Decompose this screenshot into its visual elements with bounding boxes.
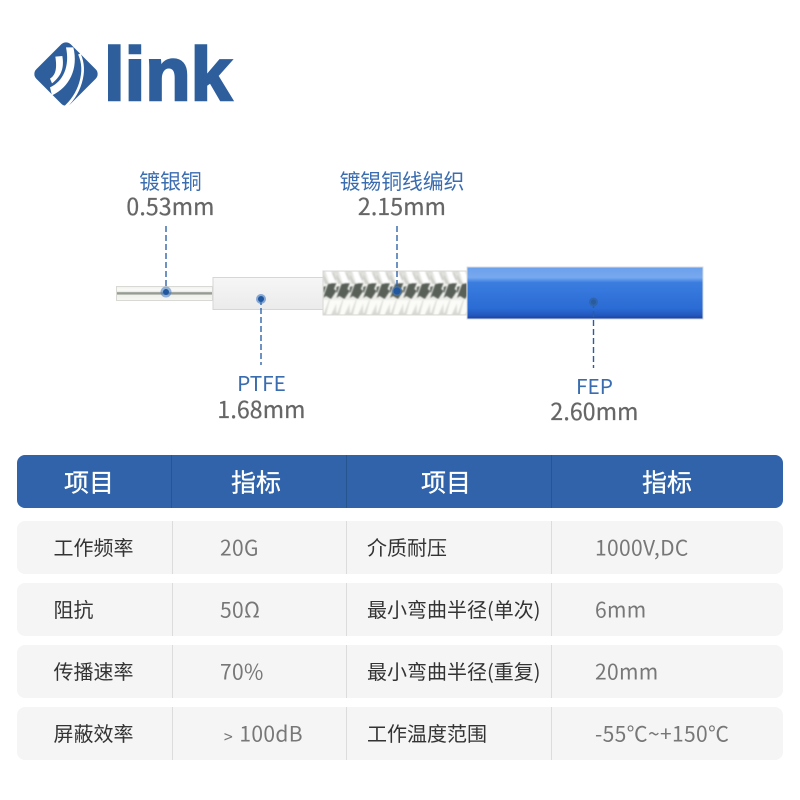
- label: silver-plated copper: [126, 165, 215, 222]
- header: item: 项目: [421, 464, 471, 500]
- material name: PTFE: [237, 367, 286, 397]
- item: 传播速率: [54, 656, 134, 685]
- item: 工作频率: [54, 532, 134, 561]
- label: tinned copper braid: [340, 165, 464, 222]
- logo: [34, 40, 234, 112]
- braided shield: [323, 271, 467, 315]
- item: 工作温度范围: [367, 718, 487, 747]
- table header: [17, 455, 783, 508]
- value: ﹥100dB: [218, 718, 303, 748]
- leader: PTFE: [256, 294, 266, 365]
- leader: FEP: [589, 298, 598, 368]
- header: value: 指标: [231, 464, 281, 500]
- value: 50Ω: [220, 594, 260, 624]
- table row 3: [17, 645, 783, 698]
- value: 1000V,DC: [595, 532, 689, 562]
- label: FEP: [550, 370, 639, 427]
- item: 屏蔽效率: [54, 718, 134, 747]
- FEP jacket: [467, 267, 703, 319]
- table row 1: [17, 521, 783, 574]
- leader: braid: [392, 226, 402, 296]
- centre conductor: [116, 286, 212, 300]
- value: 20mm: [595, 656, 659, 686]
- value: 6mm: [595, 594, 647, 624]
- label: PTFE: [217, 367, 306, 425]
- size: 0.53mm: [126, 188, 215, 222]
- cable diagram: [116, 226, 704, 368]
- item: 阻抗: [54, 594, 94, 623]
- leader: conductor: [160, 226, 172, 298]
- item: 最小弯曲半径(单次): [367, 594, 541, 623]
- item: 介质耐压: [367, 532, 447, 561]
- value: -55℃~+150℃: [595, 718, 729, 748]
- PTFE dielectric: [213, 278, 323, 310]
- material name: FEP: [576, 370, 613, 400]
- header: item: 项目: [64, 464, 114, 500]
- size: 1.68mm: [217, 391, 306, 425]
- item: 最小弯曲半径(重复): [367, 656, 541, 685]
- value: 70%: [220, 656, 264, 686]
- size: 2.60mm: [550, 393, 639, 427]
- header: value: 指标: [642, 464, 692, 500]
- size: 2.15mm: [358, 188, 446, 222]
- table row 2: [17, 583, 783, 636]
- icon: diamond J mark: [32, 40, 100, 109]
- table row 4: [17, 707, 783, 760]
- value: 20G: [220, 532, 259, 562]
- material name: 镀锡铜线编织: [340, 165, 464, 195]
- material name: 镀银铜: [139, 165, 202, 195]
